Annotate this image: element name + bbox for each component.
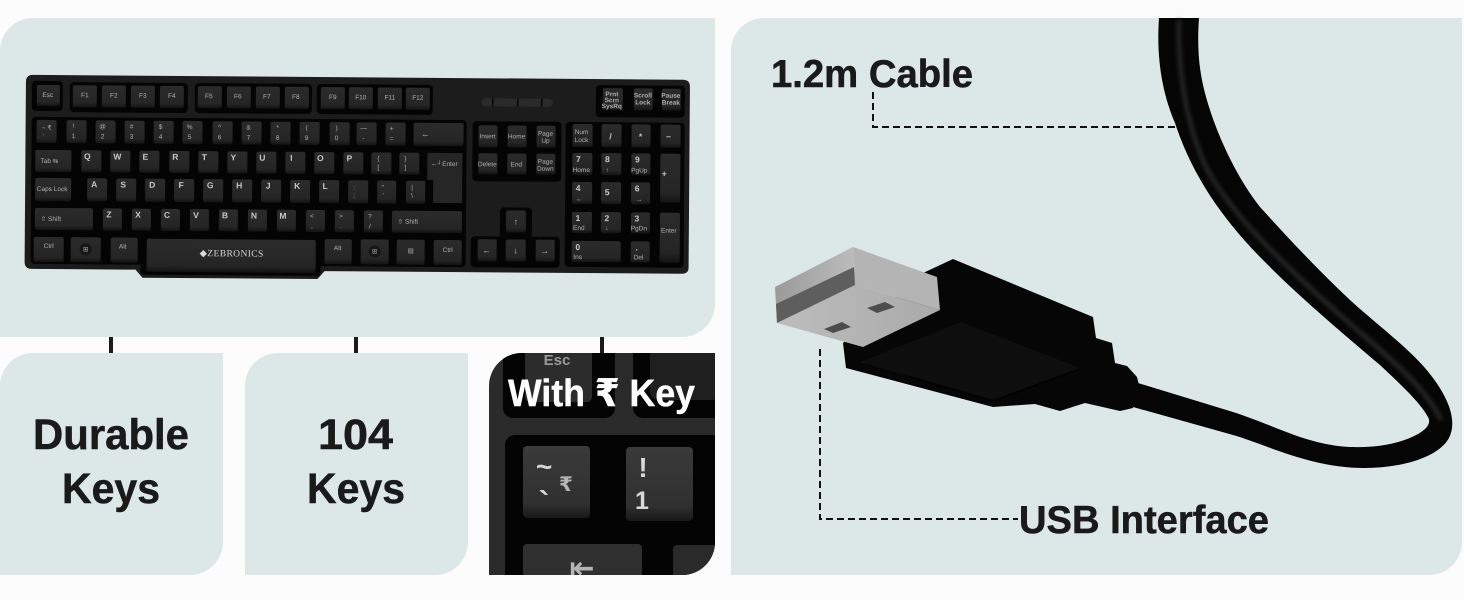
navigation and arrow keys: Page [538,159,553,166]
number key row: - [362,135,365,142]
number key row: 1 [72,133,76,140]
bottom key row with brand space bar: Alt [334,245,342,252]
function key row: F5 [205,93,213,100]
callout line: cable [873,92,1175,127]
numeric keypad: 7 [576,154,581,164]
number key row: ← [421,129,430,139]
numeric keypad: End [573,225,585,232]
navigation and arrow keys: Page [538,131,554,138]
numeric keypad: 5 [605,187,610,197]
QWERTY key row: Tab ⇆ [40,158,59,165]
number one key [626,447,693,521]
QWERTY key row [35,150,462,203]
function key row: F2 [110,92,118,100]
function key row: Scroll [634,92,652,100]
QWERTY key row: P [347,153,353,163]
numeric keypad: ← [576,196,582,203]
panel: rupee key photo: ⇤ [569,552,595,585]
ASDF key row: H [236,180,242,190]
USB cable [1133,18,1452,468]
bottom key row with brand space bar [34,237,462,274]
ZXCV key row: N [251,211,257,221]
QWERTY key row: [ [377,164,379,171]
ASDF key row: " [382,184,385,192]
numeric keypad: Home [573,167,590,174]
navigation and arrow keys: ↓ [514,245,518,256]
ZXCV key row: M [279,211,287,221]
number key row: @ [99,123,106,130]
function key row: Lock [635,99,651,107]
numeric keypad: + [662,169,667,179]
number key row: 3 [130,134,134,141]
ZXCV key row: ? [368,213,372,220]
number key row: ` [42,134,45,141]
ZXCV key row: B [222,210,228,220]
numeric keypad: 0 [575,242,580,252]
numeric keypad: → [636,196,642,203]
ASDF key row: K [294,181,301,191]
function key row: F12 [412,95,424,102]
numeric keypad: 9 [635,154,640,164]
numeric keypad: PgUp [631,167,648,174]
tilde and rupee key: ~ [536,451,552,482]
number key row: 0 [335,135,339,142]
QWERTY key row: Q [84,151,91,161]
number key row: 2 [101,133,105,140]
function key row: Prnt [605,91,619,98]
ASDF key row: ; [353,192,355,199]
function key row: Scrn [605,97,619,104]
bottom key row with brand space bar: ◆ZEBRONICS [200,249,264,260]
number key row: 9 [305,135,309,142]
bottom key row with brand space bar: Alt [119,244,127,251]
bottom key row with brand space bar: Ctrl [443,247,453,254]
ZXCV key row: C [164,210,170,220]
ASDF key row: : [353,184,355,191]
number key row: 4 [159,134,163,141]
numeric keypad: . [635,242,638,252]
ASDF key row: ' [382,192,384,200]
ZXCV key row: V [193,210,199,220]
numeric keypad: Lock [575,137,589,144]
ZXCV key row: < [310,213,314,220]
numeric keypad: PgDn [631,225,647,232]
heading: 104 keys [307,411,405,513]
number key row: % [187,124,193,131]
QWERTY key row: } [404,156,407,163]
function key row: Pause [661,93,681,100]
numeric keypad [572,124,681,263]
connector body [843,259,1139,411]
function key row: F11 [384,95,396,102]
number key row: ~ ₹ [42,124,52,132]
QWERTY key row: O [317,153,324,163]
navigation and arrow keys: Home [508,133,526,141]
function key row: F6 [234,93,242,100]
heading: durable keys: Durable [33,411,189,459]
ZXCV key row: > [339,213,343,220]
number key row: # [130,124,134,131]
keyboard illustration [24,75,690,282]
heading: 104 keys: Keys [307,465,405,513]
ASDF key row: A [91,179,97,189]
numeric keypad: ↑ [606,167,609,174]
navigation and arrow keys [477,125,556,262]
QWERTY key row: U [259,153,265,163]
QWERTY key row: T [202,152,208,162]
number key row: ) [335,125,338,132]
bottom key row with brand space bar: ▤ [408,248,414,255]
number one key: ! [638,452,648,483]
label: 1.2m cable: 1.2m Cable [771,53,973,96]
tilde and rupee key: ` [539,485,549,521]
numeric keypad: Enter [661,228,677,235]
QWERTY key row: R [172,152,178,162]
number key row: 6 [218,134,222,141]
number key row: 8 [276,135,280,142]
ASDF key row [35,178,425,204]
USB connector [775,247,1139,411]
number one key: 1 [635,487,649,515]
panel: rupee key photo: Esc [544,352,570,369]
numeric keypad: 6 [635,183,640,193]
function key row: F3 [139,93,147,100]
heading: durable keys: Keys [62,465,160,513]
navigation and arrow keys: ← [482,245,491,255]
heading: with rupee key: With ₹ Key [508,373,695,415]
numeric keypad: * [639,131,643,141]
bottom key row with brand space bar: ⊞ [83,246,89,253]
number key row: $ [159,124,163,131]
ASDF key row: | [411,185,413,192]
numeric keypad: − [666,132,671,142]
ASDF key row: J [266,181,271,191]
ZXCV key row: Z [106,209,112,219]
ZXCV key row: . [340,223,342,230]
function key row: F9 [329,94,337,101]
heading: 104 keys: 104 [318,411,393,459]
ASDF key row: S [120,180,126,190]
ZXCV key row: X [135,210,141,220]
ASDF key row: F [179,180,184,190]
function key row: SysRq [602,103,622,110]
ZXCV key row: / [369,223,371,230]
metal plug [775,247,940,347]
ASDF key row: Caps Lock [37,186,68,193]
navigation and arrow keys: ↑ [514,216,518,227]
panel: keyboard [0,18,715,337]
tilde and rupee key [523,446,590,521]
function key row: Esc [42,92,54,99]
function key row: F4 [168,93,176,100]
tilde and rupee key: ₹ [559,474,573,496]
number key row: — [360,125,367,132]
callout line: USB [820,349,1018,519]
panel: durable keys [0,353,223,575]
number key row: ! [73,123,75,130]
navigation and arrow keys: Delete [478,161,497,168]
navigation and arrow keys: Up [541,138,550,145]
function key row: F7 [263,94,271,101]
function key row: F10 [355,94,367,101]
number key row: + [390,126,394,133]
function key row: F8 [292,94,300,101]
QWERTY key row: { [377,155,380,162]
numeric keypad: Ins [573,254,583,261]
navigation and arrow keys: Insert [479,133,496,140]
numeric keypad: 3 [635,213,640,223]
numeric keypad: Del [634,254,644,261]
numeric keypad: ↓ [605,225,609,232]
ZXCV key row: , [311,223,313,230]
number key row: & [246,124,251,132]
panel: 104 keys [245,353,468,575]
heading: durable keys [33,411,189,513]
connector ticks [109,337,604,353]
bottom key row with brand space bar: ⊞ [372,248,378,255]
label: USB interface: USB Interface [1019,499,1269,542]
function key row [37,84,681,112]
QWERTY key row: W [113,151,122,162]
numeric keypad: 4 [576,183,581,193]
QWERTY key row: E [143,152,149,162]
numeric keypad: Num [575,129,588,136]
panel: rupee key photo [489,353,715,575]
ZXCV key row: ⇧ Shift [41,215,61,223]
numeric keypad: 2 [605,213,610,223]
QWERTY key row: I [290,153,293,163]
numeric keypad: / [609,131,612,141]
number key row: ( [305,125,309,132]
QWERTY key row: Y [231,152,237,162]
bottom key row with brand space bar: Ctrl [44,243,54,250]
ASDF key row: L [323,181,328,191]
QWERTY key row: ] [404,165,406,172]
numeric keypad: 8 [605,154,610,164]
ASDF key row: G [207,180,214,190]
number key row: * [276,125,279,132]
function key row: Break [662,100,680,107]
number key row [36,120,464,146]
number key row: 5 [188,134,192,141]
navigation and arrow keys: Down [537,166,554,173]
function key row: F1 [81,92,89,99]
ASDF key row: D [149,180,155,190]
ZXCV key row: ⇧ Shift [398,218,418,226]
QWERTY key row: ←┘Enter [431,160,459,168]
numeric keypad: 1 [576,213,581,223]
ASDF key row: \ [411,193,413,200]
panel: cable [731,18,1462,575]
number key row: ^ [218,124,222,131]
navigation and arrow keys: → [540,246,549,256]
number key row: = [390,136,394,143]
navigation and arrow keys: End [511,161,523,169]
ZXCV key row [35,208,462,233]
number key row: 7 [247,134,251,142]
